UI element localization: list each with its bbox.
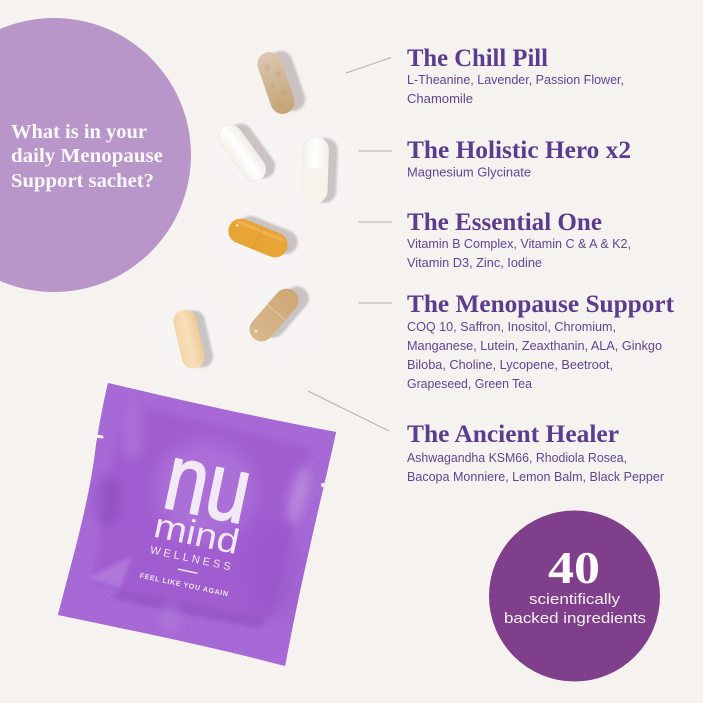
textured sealed edges bbox=[58, 383, 336, 666]
text block: The Chill Pill: Chamomile bbox=[407, 91, 473, 106]
callout: 40 ingredients: backed ingredients bbox=[504, 610, 646, 627]
text block: The Menopause Support: COQ 10, Saffron, Inositol, Chromium, bbox=[407, 319, 616, 334]
heading: question: Support sachet? bbox=[11, 171, 154, 192]
sachet folds bbox=[155, 440, 255, 540]
sachet inner pouch bbox=[92, 402, 310, 620]
text block: The Holistic Hero x2: The Holistic Hero x2 bbox=[407, 137, 631, 164]
text block: The Chill Pill bbox=[407, 45, 624, 106]
text block: The Ancient Healer bbox=[407, 421, 665, 484]
callout: 40 ingredients: scientifically bbox=[529, 591, 621, 608]
panel: question circle bbox=[0, 18, 191, 292]
text block: The Menopause Support: Biloba, Choline, Lycopene, Beetroot, bbox=[407, 357, 613, 372]
heading: question: daily Menopause bbox=[11, 146, 163, 167]
text block: The Menopause Support: The Menopause Support bbox=[407, 291, 675, 318]
text block: The Essential One bbox=[407, 209, 631, 270]
text block: The Essential One: The Essential One bbox=[407, 209, 602, 236]
text block: The Ancient Healer: Bacopa Monniere, Lemon Balm, Black Pepper bbox=[407, 469, 665, 484]
text block: The Menopause Support: Grapeseed, Green Tea bbox=[407, 376, 533, 391]
soft glow behind capsules bbox=[154, 121, 350, 378]
logo: mind bbox=[151, 506, 243, 562]
text block: The Chill Pill: L-Theanine, Lavender, Passion Flower, bbox=[407, 72, 624, 87]
text block: The Holistic Hero x2: Magnesium Glycinate bbox=[407, 164, 531, 180]
icon: orange capsule, The Essential One bbox=[225, 212, 301, 261]
text block: The Chill Pill: The Chill Pill bbox=[407, 45, 548, 72]
text block: The Menopause Support: Manganese, Lutein, Zeaxthanin, ALA, Ginkgo bbox=[407, 338, 662, 353]
icon: cream capsule bbox=[171, 307, 215, 371]
text block: The Holistic Hero x2 bbox=[407, 137, 631, 180]
logo bbox=[139, 422, 260, 598]
text block: The Essential One: Vitamin D3, Zinc, Iodine bbox=[407, 255, 542, 270]
logo: FEEL LIKE YOU AGAIN bbox=[139, 573, 228, 598]
callout: 40 ingredients bbox=[489, 510, 660, 682]
logo: WELLNESS bbox=[149, 544, 232, 573]
callout: 40 ingredients: 40 bbox=[548, 542, 600, 593]
tear notches bbox=[96, 436, 102, 437]
icon: tan capsule, The Chill Pill bbox=[254, 48, 308, 117]
text block: The Menopause Support bbox=[407, 291, 675, 391]
heading: question bbox=[11, 122, 163, 192]
icon: sachet bbox=[58, 383, 336, 666]
icon: white capsule, The Holistic Hero bbox=[213, 119, 280, 186]
text block: The Essential One: Vitamin B Complex, Vitamin C & A & K2, bbox=[407, 236, 631, 251]
heading: question: What is in your bbox=[11, 122, 147, 143]
logo: nu bbox=[156, 423, 260, 543]
text block: The Ancient Healer: Ashwagandha KSM66, Rhodiola Rosea, bbox=[407, 450, 627, 465]
text block: The Ancient Healer: The Ancient Healer bbox=[407, 421, 619, 448]
leader lines bbox=[308, 58, 392, 431]
icon: white capsule, The Holistic Hero second bbox=[301, 137, 338, 204]
icon: tan capsule, The Menopause Support bbox=[245, 281, 314, 346]
